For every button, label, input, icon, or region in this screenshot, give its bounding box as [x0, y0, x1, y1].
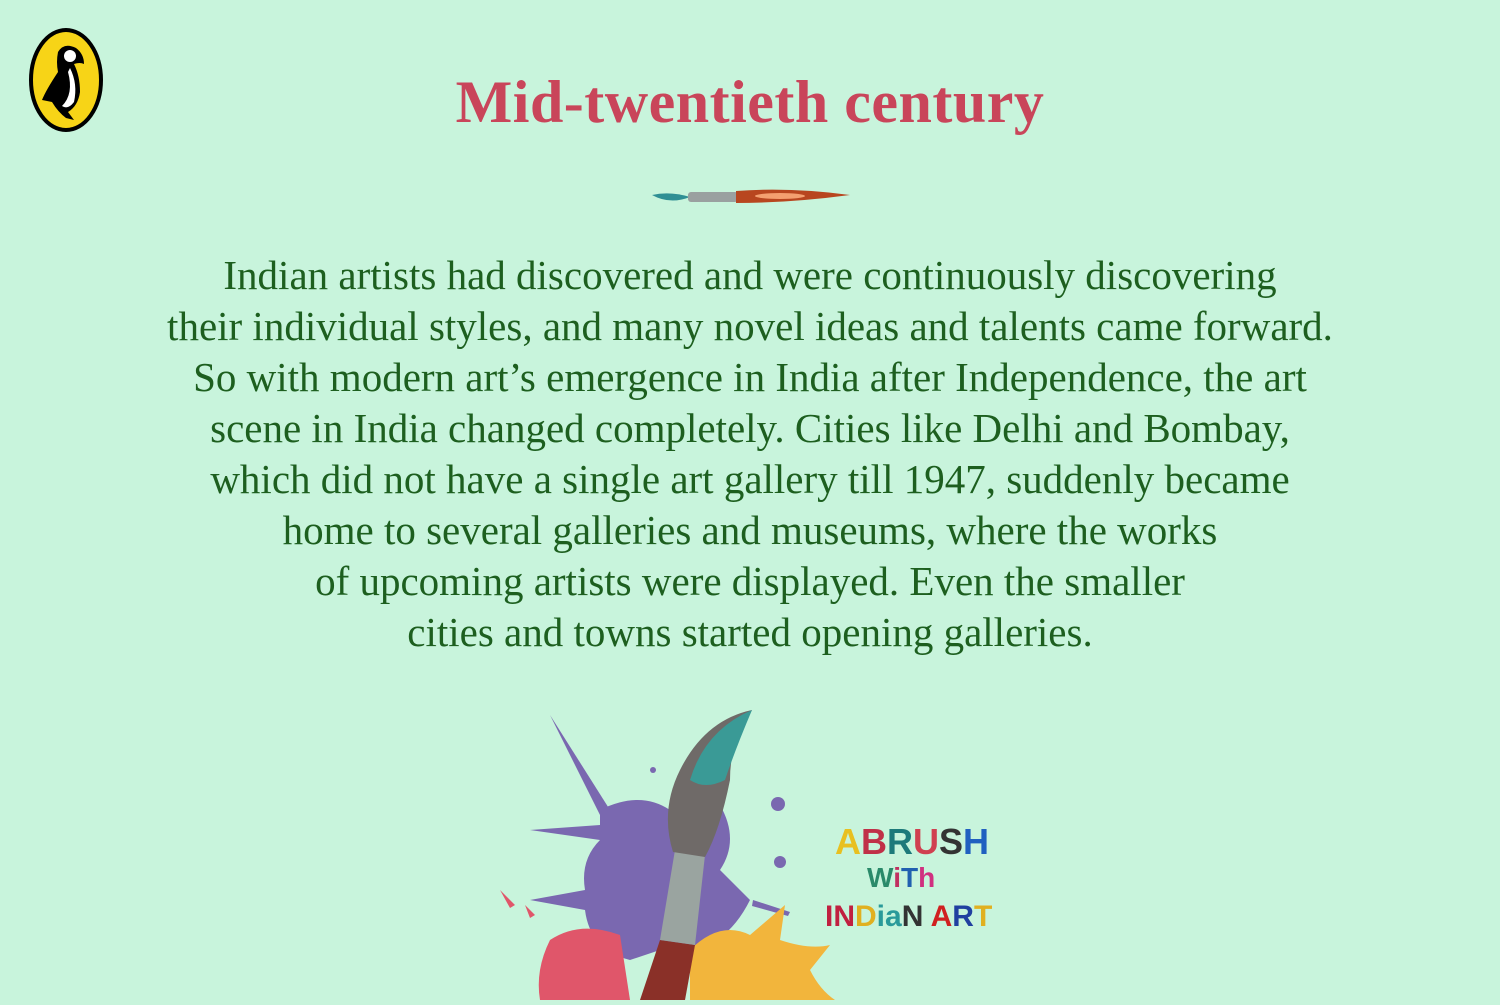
illustration: paint splashes and brush	[500, 710, 835, 1000]
icon: small paintbrush divider	[652, 190, 850, 203]
text block: body paragraph: home to several galleries and museums, where the works	[283, 507, 1217, 553]
text block: body paragraph: which did not have a single art gallery till 1947, suddenly became	[210, 456, 1290, 502]
text block: body paragraph	[167, 252, 1333, 655]
logo: A Brush With Indian Art: ABRUSH	[835, 821, 989, 862]
text block: body paragraph: Indian artists had discovered and were continuously discovering	[223, 252, 1277, 298]
logo: A Brush With Indian Art: WiTh	[867, 862, 935, 893]
logo: A Brush With Indian Art: INDiaN ART	[825, 900, 992, 933]
text block: body paragraph: their individual styles, and many novel ideas and talents came forward.	[167, 303, 1333, 349]
title: Mid-twentieth century	[456, 69, 1044, 135]
logo: penguin puffin	[29, 28, 103, 132]
text block: body paragraph: So with modern art’s emergence in India after Independence, the art	[193, 354, 1307, 400]
text block: body paragraph: scene in India changed completely. Cities like Delhi and Bombay,	[210, 405, 1290, 451]
logo: A Brush With Indian Art	[825, 821, 992, 933]
text block: body paragraph: of upcoming artists were displayed. Even the smaller	[315, 558, 1185, 604]
text block: body paragraph: cities and towns started opening galleries.	[407, 609, 1093, 655]
